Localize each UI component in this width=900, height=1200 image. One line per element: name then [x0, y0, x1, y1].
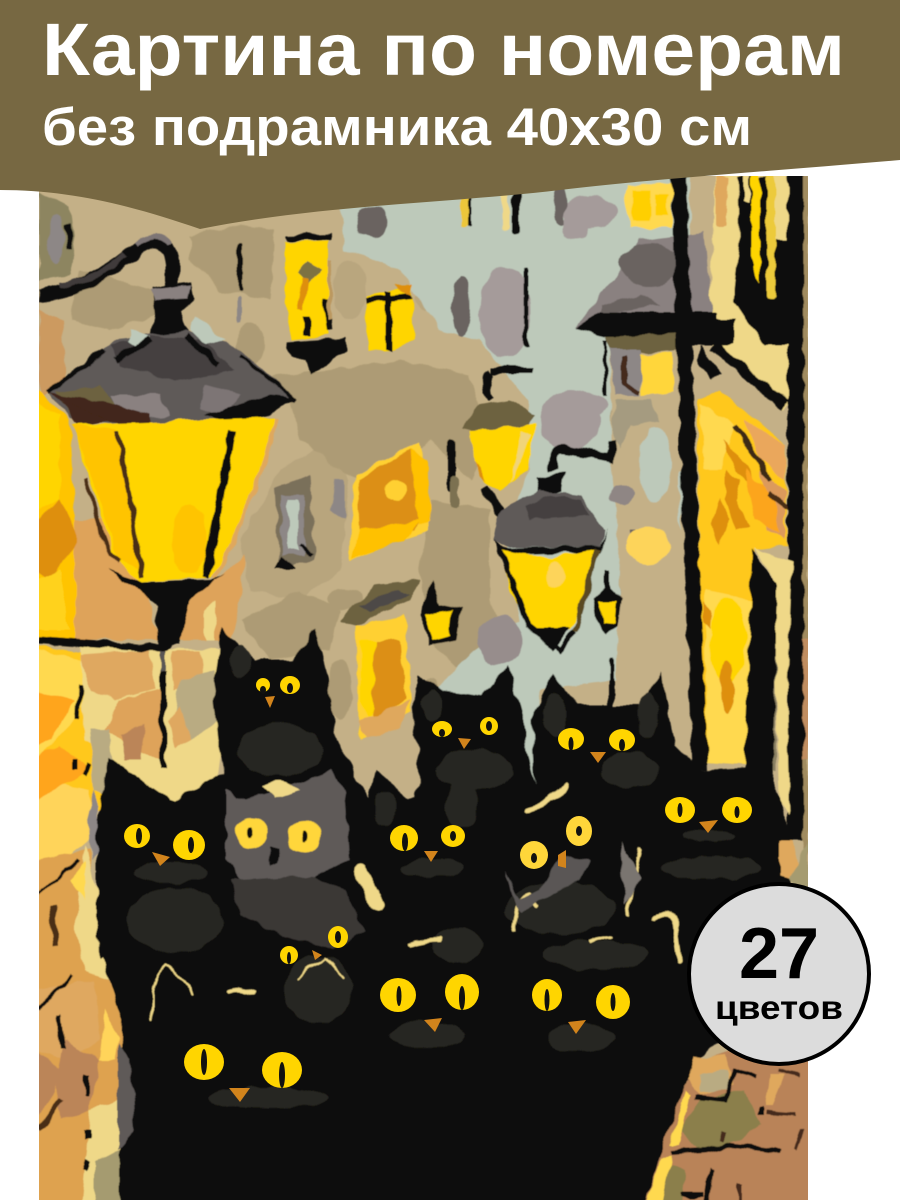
- right hand cream building: [710, 170, 792, 410]
- left yellow strip: [39, 389, 78, 642]
- lamp base: [108, 568, 226, 645]
- window 2: [366, 285, 414, 352]
- small black streaks: [239, 190, 612, 705]
- upper yellow window in tower: [624, 183, 672, 228]
- lamp finial: [150, 282, 193, 340]
- cream highlights: [152, 785, 680, 1020]
- arch window: [340, 580, 420, 740]
- brick corner: [638, 1050, 820, 1200]
- tower eave: [575, 312, 718, 340]
- tower window: [640, 352, 674, 395]
- grey side streak: [118, 1045, 135, 1150]
- orange wall under lantern: [75, 520, 160, 640]
- main dark mass: [97, 760, 792, 1200]
- building wall shading: [71, 224, 612, 720]
- cat eyes and noses: [124, 676, 752, 1102]
- painting: [30, 170, 820, 1200]
- grey shading cat H: [505, 855, 590, 915]
- badge: 27 colours: [689, 884, 869, 1064]
- small lantern centre-left: [419, 580, 460, 645]
- grey washes: [330, 196, 618, 664]
- yellow wall panel: [697, 390, 787, 765]
- window 1: [285, 236, 346, 376]
- lower left wall: [39, 644, 102, 812]
- cats silhouette group: [97, 550, 808, 1200]
- upper lantern: [462, 370, 535, 520]
- fur patches: [127, 644, 762, 1109]
- back cat silhouettes: [213, 628, 525, 830]
- wall cracks: [39, 625, 180, 1170]
- tower wall patches: [612, 400, 660, 450]
- sky: [340, 172, 690, 790]
- lamp glass: [73, 417, 278, 582]
- tiny lantern: [592, 570, 622, 636]
- window: dark shuttered: [275, 475, 315, 570]
- big amber window: [350, 442, 430, 560]
- black verticals: [679, 176, 700, 770]
- left top wall: [39, 192, 75, 280]
- lamp ribs: [205, 430, 232, 578]
- cream strip: [755, 548, 792, 815]
- lamp roof: [47, 330, 295, 425]
- lantern with arm, centre right: [492, 440, 612, 652]
- header banner: [0, 0, 900, 229]
- dark window slit: [733, 176, 790, 345]
- tower roof: [575, 232, 712, 328]
- badge: 27 colours: 27: [739, 914, 819, 994]
- badge: 27 colours: цветов: [715, 989, 843, 1026]
- small lit lamp on tower: [629, 529, 636, 534]
- subtitle: без подрамника 40х30 см: [42, 98, 752, 157]
- lamp arm: [39, 242, 172, 296]
- grey cat: [226, 770, 365, 950]
- title: Картина по номерам: [42, 8, 845, 91]
- big street lamp: [39, 236, 295, 645]
- tan over sky: [612, 340, 682, 720]
- wall drip bits: [780, 840, 800, 880]
